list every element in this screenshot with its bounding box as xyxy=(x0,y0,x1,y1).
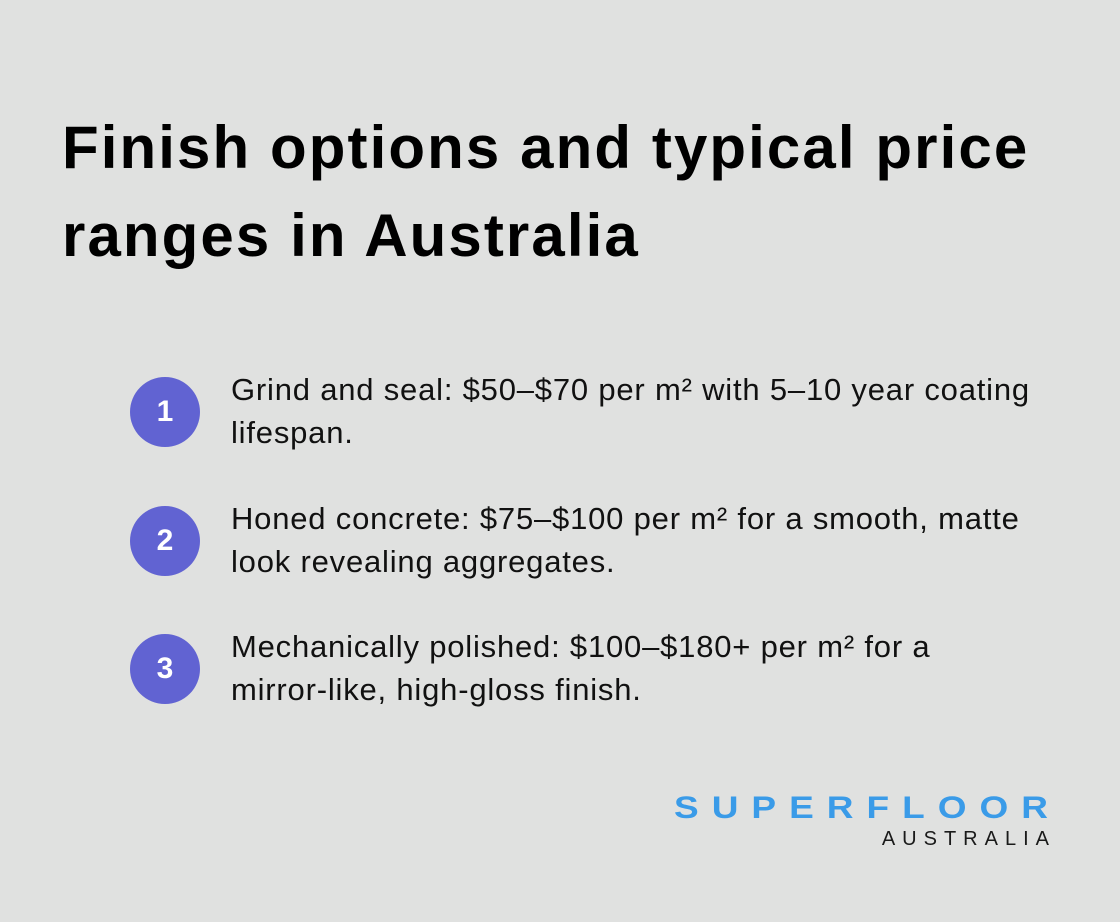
logo: AUSTRALIA xyxy=(882,828,1056,850)
item 2 xyxy=(130,501,1020,579)
title: Finish options and typical price xyxy=(62,114,1029,181)
item 3 xyxy=(130,629,930,707)
badge 3: 3 xyxy=(157,652,173,685)
text 2 xyxy=(231,501,1020,579)
logo xyxy=(674,790,1061,850)
badge 1 xyxy=(130,377,200,447)
title xyxy=(62,114,1029,269)
item 1 xyxy=(130,372,1030,450)
badge 2 xyxy=(130,506,200,576)
text 3 xyxy=(231,629,930,707)
text 2: look revealing aggregates. xyxy=(231,544,615,579)
badge 1: 1 xyxy=(157,395,173,428)
text 3: Mechanically polished: $100–$180+ per m² for a xyxy=(231,629,930,664)
text 2: Honed concrete: $75–$100 per m² for a smooth, matte xyxy=(231,501,1020,536)
text 3: mirror-like, high-gloss finish. xyxy=(231,672,642,707)
logo: SUPERFLOOR xyxy=(674,790,1061,825)
text 1 xyxy=(231,372,1030,450)
badge 2: 2 xyxy=(157,524,173,557)
text 1: Grind and seal: $50–$70 per m² with 5–10 year coating xyxy=(231,372,1030,407)
badge 3 xyxy=(130,634,200,704)
title: ranges in Australia xyxy=(62,202,640,269)
text 1: lifespan. xyxy=(231,415,354,450)
